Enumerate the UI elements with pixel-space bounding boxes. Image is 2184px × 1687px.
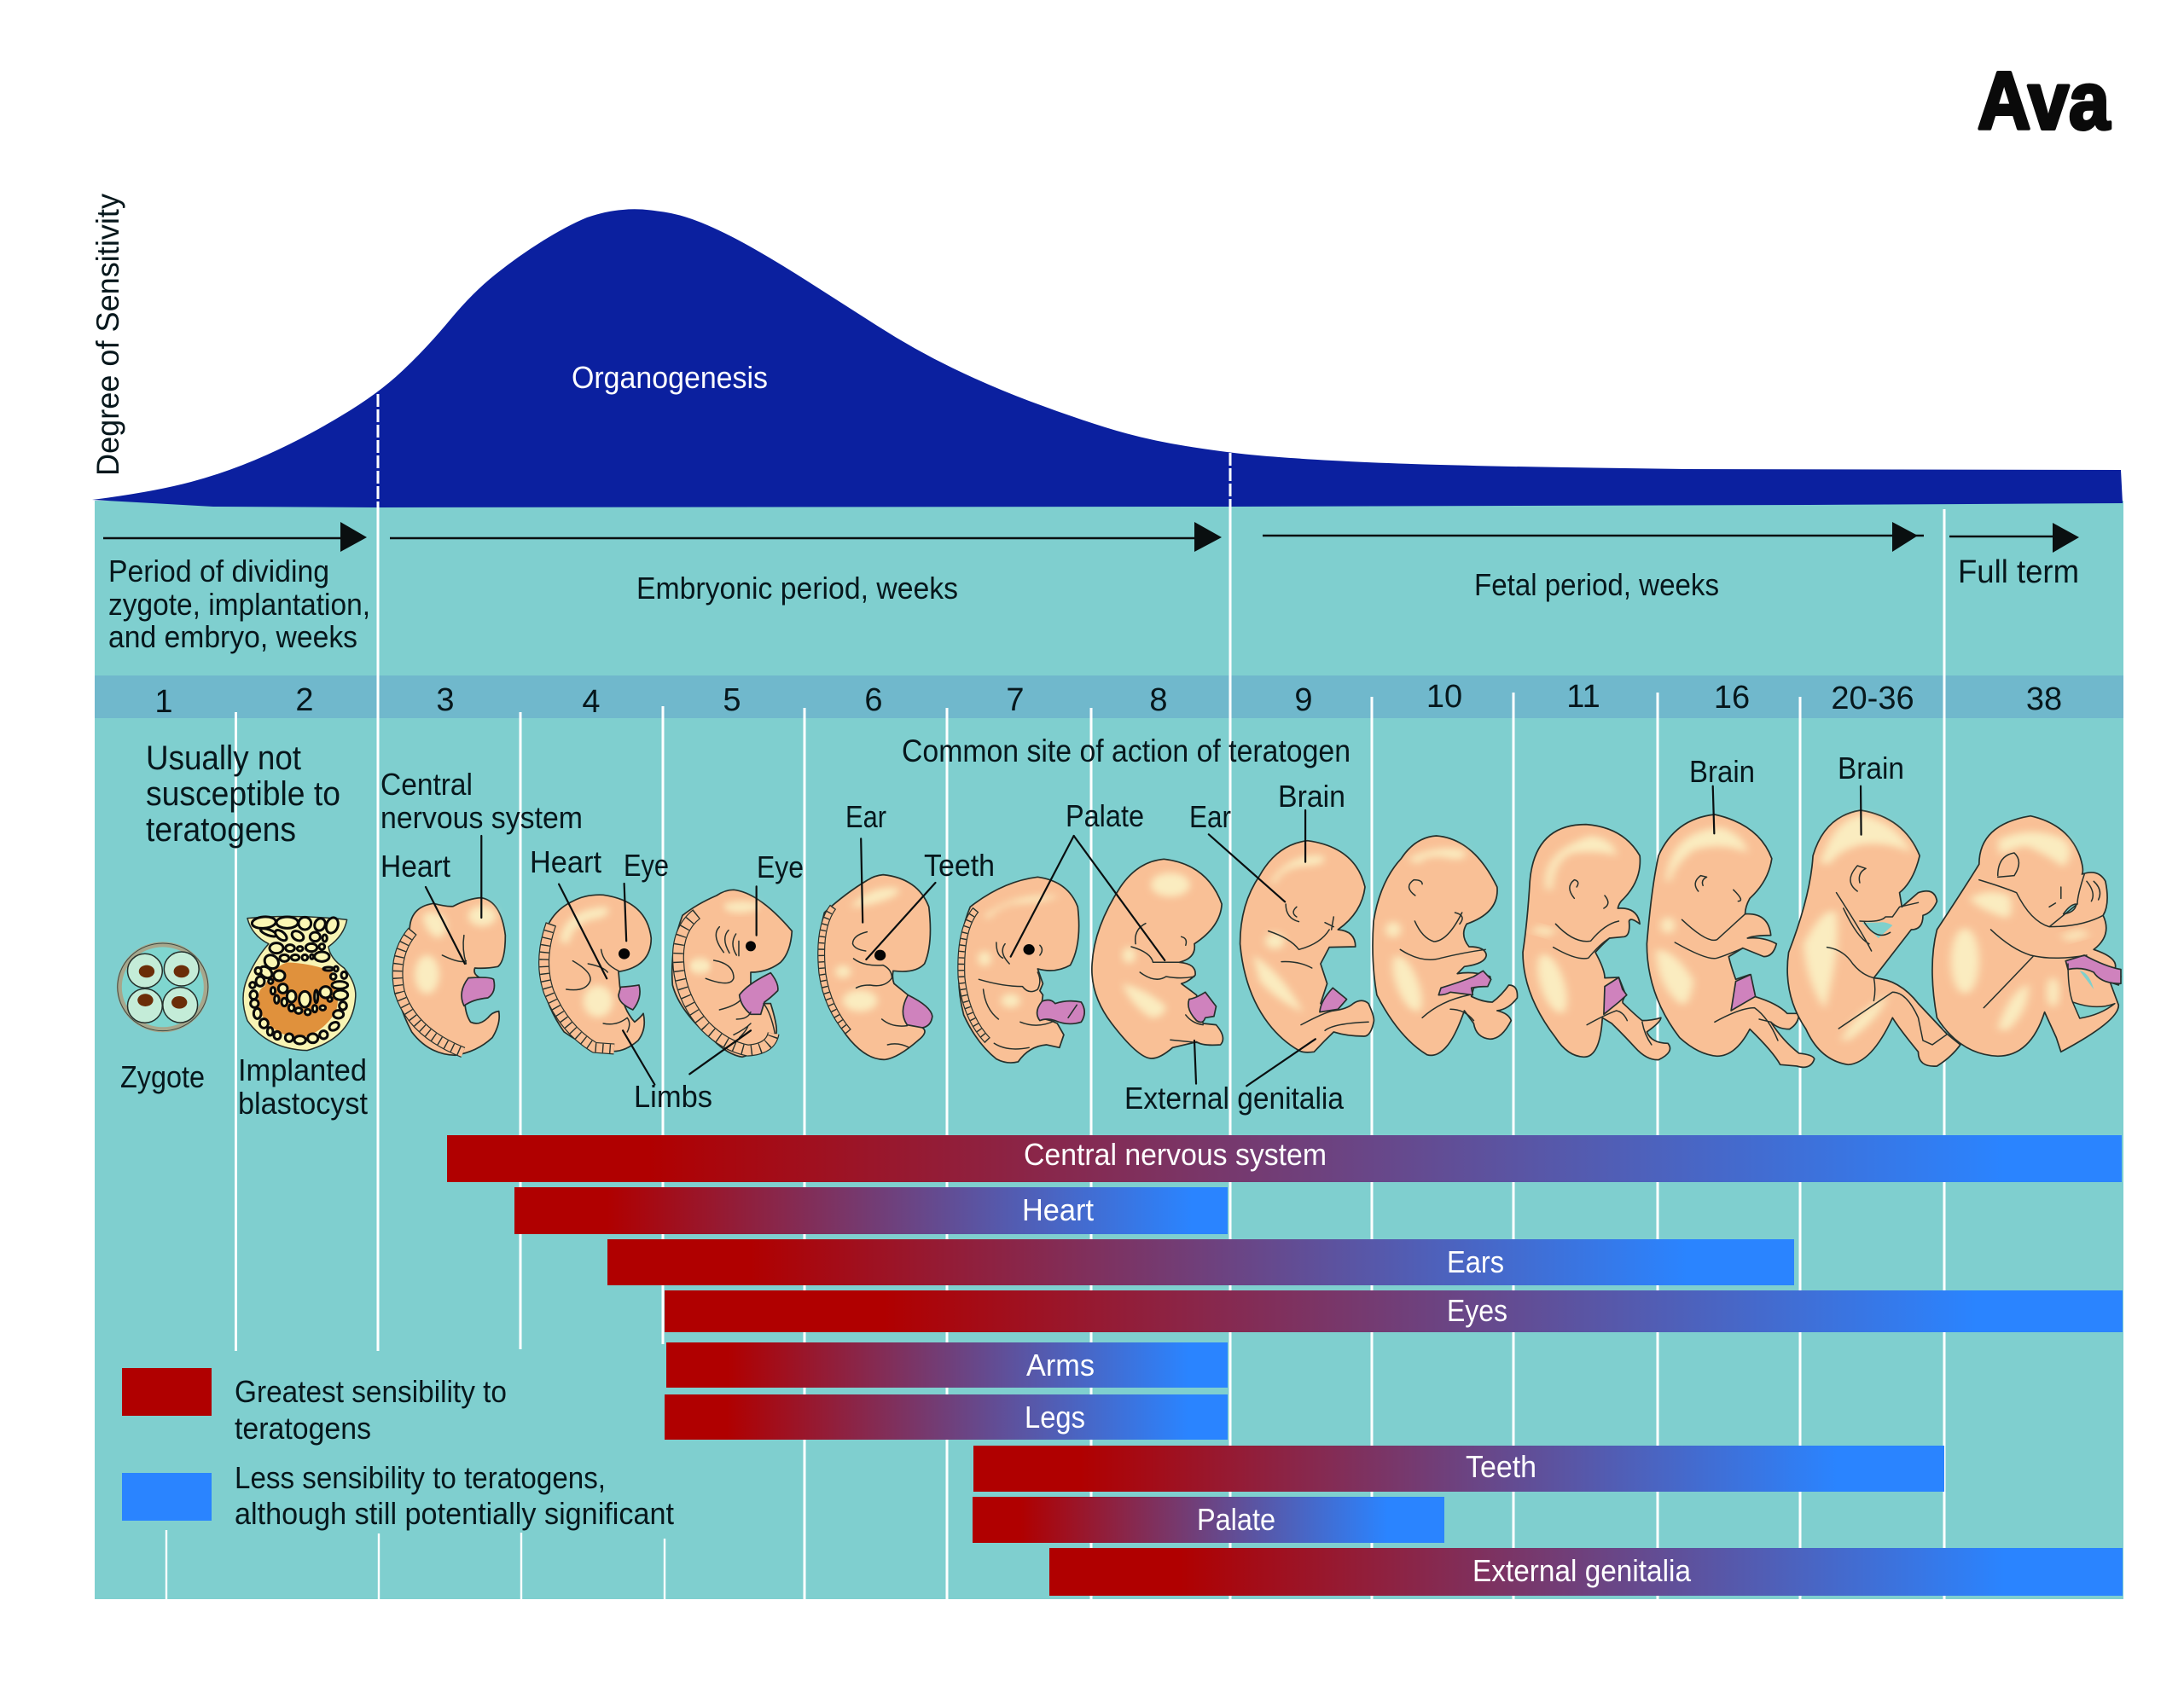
week numbers: 16 bbox=[1714, 680, 1750, 716]
period label: embryonic: Embryonic period, weeks bbox=[636, 571, 958, 606]
label: teeth: Teeth bbox=[924, 848, 995, 883]
bar: eyes bbox=[665, 1290, 2123, 1332]
legend text: less sensibility: Less sensibility to teratogens, bbox=[235, 1460, 606, 1495]
period label: full term: Full term bbox=[1958, 554, 2079, 590]
teal background panel bbox=[95, 501, 2123, 1599]
label: implanted blastocyst: Implanted bbox=[238, 1052, 367, 1087]
label: implanted blastocyst bbox=[238, 1052, 368, 1121]
week numbers: 7 bbox=[1006, 682, 1025, 718]
arrow: embryonic period bbox=[390, 522, 1222, 552]
icon: implanted blastocyst bbox=[243, 916, 356, 1051]
week numbers: 38 bbox=[2026, 681, 2062, 717]
arrow: dividing zygote period bbox=[103, 522, 367, 552]
week numbers: 20-36 bbox=[1831, 681, 1914, 716]
week divider lines bbox=[166, 394, 1944, 1599]
bar: central nervous system bbox=[447, 1135, 2122, 1182]
bar: arms: Arms bbox=[1026, 1348, 1095, 1383]
week numbers: 9 bbox=[1294, 682, 1313, 718]
bar: teeth: Teeth bbox=[1466, 1449, 1536, 1484]
label: heart week 4: Heart bbox=[530, 844, 601, 879]
legend text: less sensibility: although still potentially significant bbox=[235, 1496, 674, 1531]
embryo: week 3 bbox=[394, 836, 505, 1055]
heading: common site of action: Common site of action of teratogen bbox=[902, 733, 1350, 768]
label: zygote: Zygote bbox=[120, 1059, 205, 1094]
legend swatch: greatest sensibility bbox=[122, 1368, 212, 1416]
label: brain week 9: Brain bbox=[1278, 779, 1345, 814]
bar: heart: Heart bbox=[1022, 1192, 1094, 1227]
callout: usually not susceptible: Usually not bbox=[146, 739, 301, 777]
period label: dividing zygote bbox=[108, 554, 370, 654]
period label: dividing zygote: and embryo, weeks bbox=[108, 619, 357, 654]
bar: heart bbox=[514, 1187, 1228, 1234]
week numbers: 1 bbox=[154, 684, 173, 720]
bar: eyes: Eyes bbox=[1447, 1293, 1507, 1328]
legend text: less sensibility bbox=[235, 1460, 674, 1531]
sensitivity curve bbox=[92, 209, 2123, 507]
fetus: week 16 bbox=[1647, 786, 1815, 1067]
embryo: week 8 bbox=[1074, 836, 1223, 1084]
period label: dividing zygote: zygote, implantation, bbox=[108, 587, 370, 622]
legend swatch: less sensibility bbox=[122, 1473, 212, 1521]
embryo: week 6 bbox=[819, 838, 935, 1059]
arrow: fetal period bbox=[1263, 522, 1924, 552]
bar: legs bbox=[665, 1394, 1228, 1440]
label: external genitalia: External genitalia bbox=[1124, 1081, 1345, 1116]
week numbers: 6 bbox=[864, 682, 883, 718]
bar: palate bbox=[973, 1497, 1444, 1543]
week numbers bbox=[154, 679, 2062, 720]
callout: usually not susceptible: teratogens bbox=[146, 811, 296, 849]
bar: arms bbox=[666, 1342, 1228, 1388]
week number band bbox=[95, 675, 2123, 718]
label: ear week 9: Ear bbox=[1189, 799, 1231, 834]
bar: teeth bbox=[973, 1446, 1944, 1492]
label: central nervous system: nervous system bbox=[380, 800, 583, 835]
callout: usually not susceptible: susceptible to bbox=[146, 775, 340, 813]
legend text: greatest sensibility: Greatest sensibility to bbox=[235, 1374, 507, 1409]
logo: Ava: Ava bbox=[1978, 55, 2111, 147]
legend bbox=[122, 1368, 674, 1531]
embryo: week 7 bbox=[959, 836, 1084, 1063]
week numbers: 11 bbox=[1566, 679, 1600, 715]
fetus: week 9 bbox=[1209, 810, 1374, 1086]
bar: legs: Legs bbox=[1025, 1400, 1085, 1435]
arrow: full term bbox=[1949, 523, 2079, 553]
label: heart week 3: Heart bbox=[380, 849, 450, 884]
label: central nervous system bbox=[380, 767, 583, 835]
bar: palate: Palate bbox=[1197, 1502, 1275, 1537]
embryo: week 5 bbox=[672, 886, 792, 1074]
icon: zygote bbox=[118, 943, 208, 1031]
week numbers: 10 bbox=[1426, 679, 1462, 715]
period label: fetal: Fetal period, weeks bbox=[1474, 567, 1719, 602]
fetus: weeks 20-36 bbox=[1787, 786, 1960, 1066]
bar: external genitalia: External genitalia bbox=[1472, 1553, 1692, 1588]
bar: ears bbox=[607, 1239, 1794, 1285]
label: implanted blastocyst: blastocyst bbox=[238, 1086, 368, 1121]
fetus: week 38 bbox=[1932, 816, 2121, 1056]
embryo: week 4 bbox=[541, 884, 654, 1085]
week numbers: 4 bbox=[582, 684, 601, 720]
bar: external genitalia bbox=[1049, 1548, 2123, 1596]
label: limbs: Limbs bbox=[634, 1079, 712, 1114]
period label: dividing zygote: Period of dividing bbox=[108, 554, 329, 588]
bar: central nervous system: Central nervous system bbox=[1024, 1137, 1327, 1172]
label: brain week 20-36: Brain bbox=[1838, 751, 1904, 786]
week numbers: 8 bbox=[1149, 682, 1168, 718]
fetus: week 11 bbox=[1523, 825, 1670, 1060]
week numbers: 5 bbox=[723, 682, 741, 718]
label: central nervous system: Central bbox=[380, 767, 473, 802]
label: eye week 4: Eye bbox=[624, 848, 669, 883]
fetus: week 10 bbox=[1373, 836, 1518, 1055]
label: ear week 6: Ear bbox=[845, 799, 886, 834]
label: eye week 5: Eye bbox=[757, 849, 804, 884]
label: palate: Palate bbox=[1066, 798, 1144, 833]
callout: usually not susceptible bbox=[146, 739, 340, 849]
bar: ears: Ears bbox=[1447, 1244, 1504, 1279]
week numbers: 2 bbox=[295, 682, 314, 718]
y-axis title: Degree of Sensitivity bbox=[90, 194, 125, 476]
legend text: greatest sensibility: teratogens bbox=[235, 1411, 371, 1446]
week numbers: 3 bbox=[436, 682, 455, 718]
legend text: greatest sensibility bbox=[235, 1374, 507, 1446]
curve label: Organogenesis bbox=[572, 360, 768, 395]
label: brain week 16: Brain bbox=[1689, 754, 1755, 789]
